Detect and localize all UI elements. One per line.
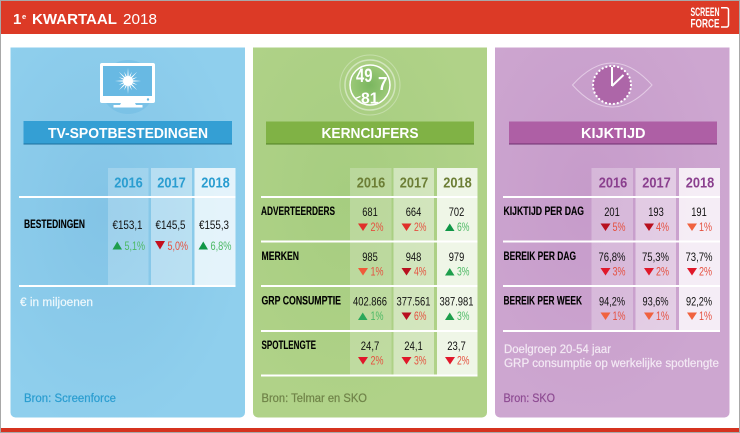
note: doelgroep: Doelgroep 20-54 jaar [504,344,611,356]
row: merken: 979 [449,250,464,264]
row: kijktijd per dag: 5% [612,220,626,234]
table years: 2017 [400,176,428,192]
row: merken [262,249,470,278]
row: bereik per week: BEREIK PER WEEK [504,294,582,308]
table years [599,176,714,192]
table years: 2018 [686,176,714,192]
panel: TV-spotbestedingen [10,48,245,418]
row: bestedingen: €155,3 [199,218,229,232]
heading: 1e kwartaal 2018: 2018 [123,11,157,28]
table: kerncijfers [261,168,478,376]
row: spotlengte: SPOTLENGTE [262,338,316,352]
row: bereik per dag [504,249,713,278]
row: bereik per dag: 76,8% [598,250,626,264]
row: merken: 948 [406,250,421,264]
row: adverteerders: 664 [406,205,421,219]
icon: numbers dial: 49 [356,66,372,87]
row: bestedingen: 5,1% [124,239,145,253]
heading bar: TV-spotbestedingen: TV-SPOTBESTEDINGEN [48,125,208,142]
row: kijktijd per dag: 1% [699,220,712,234]
row: adverteerders: 2% [414,220,427,234]
logo: Screenforce: FORCE [690,16,720,30]
panel: kerncijfers [253,48,487,418]
logo: Screenforce: SCREEN [690,5,720,19]
table years: 2016 [357,176,385,192]
heading bar: kerncijfers: KERNCIJFERS [322,125,418,142]
row: spotlengte: 24,7 [361,339,380,353]
row: GRP consumptie: 3% [457,309,470,323]
note: doelgroep [504,344,719,370]
table years [114,176,230,192]
panel: kijktijd [495,48,730,418]
table years: 2017 [157,176,186,192]
row: GRP consumptie: 377.561 [396,294,431,308]
table: bestedingen [19,168,236,287]
row: bestedingen: €145,5 [156,218,186,232]
heading: 1e kwartaal 2018: KWARTAAL [32,11,117,28]
icon: television [100,60,155,114]
row: GRP consumptie [262,294,474,323]
row: spotlengte [262,338,470,368]
icon: numbers dial: 81 [361,90,379,108]
table years: 2018 [201,176,230,192]
row: bereik per week: 1% [656,309,669,323]
note: in miljoenen: € in miljoenen [20,297,93,309]
row: spotlengte: 2% [370,354,384,368]
row: kijktijd per dag: KIJKTIJD PER DAG [504,204,584,218]
row: GRP consumptie: 6% [414,309,427,323]
header bar [1,1,739,34]
bottom red bar [1,428,739,432]
row: adverteerders [261,204,470,234]
heading: 1e kwartaal 2018: 1 [13,11,21,28]
row: bereik per week: 94,2% [599,294,625,308]
row: GRP consumptie: 1% [370,309,384,323]
row: merken: 985 [362,250,378,264]
row: adverteerders: 2% [370,220,384,234]
row: merken: 1% [370,264,384,278]
row: bestedingen: 5,0% [168,239,188,253]
heading bar: kijktijd: KIJKTIJD [581,125,646,142]
source: SKO: Bron: SKO [504,393,555,405]
icon: numbers dial [340,55,400,115]
row: bereik per dag: 2% [656,264,669,278]
row: kijktijd per dag: 201 [604,205,620,219]
row: GRP consumptie: 402.866 [353,294,387,308]
row: merken: MERKEN [262,249,299,263]
row: bereik per week: 1% [612,309,626,323]
icon: eye with clock [572,63,652,107]
source: Telmar en SKO: Bron: Telmar en SKO [262,393,367,405]
row: bereik per dag: 3% [612,264,626,278]
row: bestedingen: €153,1 [112,218,143,232]
note: doelgroep: GRP consumptie op werkelijke spotlengte [504,358,719,370]
row: GRP consumptie: GRP CONSUMPTIE [262,294,341,308]
heading bar: kijktijd [509,122,717,144]
table years: 2016 [599,176,627,192]
row: adverteerders: 681 [362,205,378,219]
table years: 2018 [443,176,472,192]
heading: 1e kwartaal 2018 [13,11,157,28]
heading bar: kerncijfers [266,122,474,144]
heading: 1e kwartaal 2018: e [22,12,26,21]
row: bestedingen: 6,8% [210,239,232,253]
row: kijktijd per dag [504,204,712,234]
row: bereik per week: 1% [699,309,712,323]
table years: 2016 [114,176,143,192]
row: spotlengte: 23,7 [447,339,466,353]
table years: 2017 [642,176,671,192]
row: bestedingen: BESTEDINGEN [24,217,85,231]
row: adverteerders: 702 [449,205,464,219]
icon: numbers dial: < [354,92,361,106]
row: adverteerders: 6% [457,220,470,234]
table years [357,176,472,192]
row: spotlengte: 3% [414,354,427,368]
row: bereik per dag: 75,3% [642,250,669,264]
row: kijktijd per dag: 4% [656,220,669,234]
table: kijktijd [503,168,720,332]
row: GRP consumptie: 387.981 [440,294,474,308]
row: bereik per week [504,294,712,323]
row: kijktijd per dag: 191 [691,205,707,219]
row: spotlengte: 2% [457,354,470,368]
row: bereik per week: 92,2% [686,294,712,308]
row: bereik per dag: BEREIK PER DAG [504,249,576,263]
row: bereik per dag: 73,7% [686,250,713,264]
row: bereik per week: 93,6% [642,294,669,308]
row: adverteerders: ADVERTEERDERS [261,204,335,218]
source: Screenforce: Bron: Screenforce [24,393,116,405]
heading bar: TV-spotbestedingen [24,121,232,144]
logo: Screenforce [690,5,728,30]
row: spotlengte: 24,1 [404,339,423,353]
row: merken: 4% [414,264,427,278]
row: bereik per dag: 2% [699,264,712,278]
row: merken: 3% [457,264,470,278]
row: kijktijd per dag: 193 [648,205,664,219]
row: bestedingen [24,217,232,253]
icon: numbers dial: 7 [378,74,388,94]
